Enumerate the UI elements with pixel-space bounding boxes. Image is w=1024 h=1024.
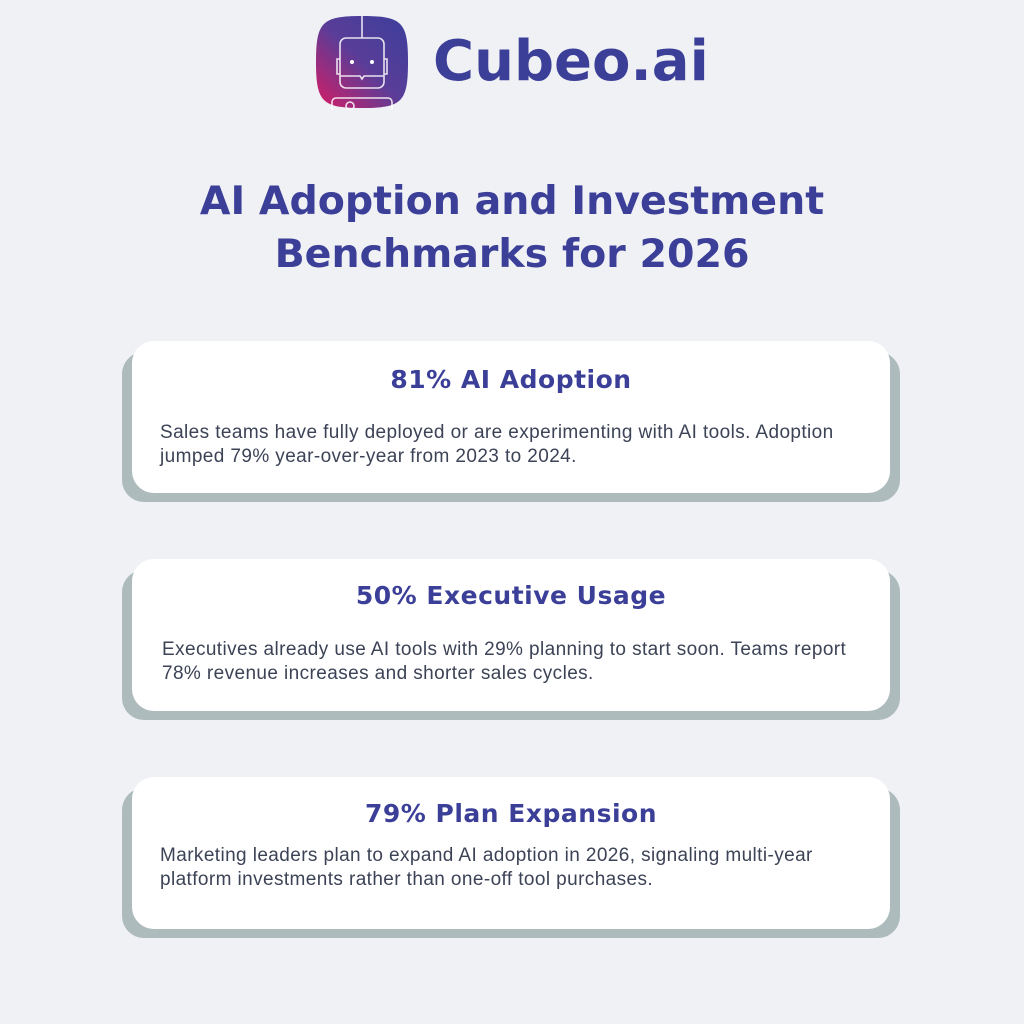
text: Marketing leaders plan to expand AI adoption in 2026, signaling multi-year — [160, 845, 813, 866]
panel: 81% AI Adoption — [132, 341, 890, 493]
title: Benchmarks for 2026 — [275, 231, 749, 277]
panel: 50% Executive Usage — [132, 559, 890, 711]
text — [160, 422, 834, 467]
heading: 50% Executive Usage — [356, 581, 666, 610]
brand name: Cubeo.ai — [433, 29, 709, 94]
text: Executives already use AI tools with 29% planning to start soon. Teams report — [162, 639, 846, 660]
icon: robot — [316, 16, 408, 110]
text — [160, 845, 813, 890]
text — [162, 639, 846, 684]
text: platform investments rather than one-off tool purchases. — [160, 869, 653, 890]
text: 78% revenue increases and shorter sales cycles. — [162, 663, 594, 684]
heading: 81% AI Adoption — [390, 365, 632, 394]
title — [200, 178, 824, 277]
panel: 79% Plan Expansion — [132, 777, 890, 929]
heading: 79% Plan Expansion — [365, 799, 657, 828]
text: jumped 79% year-over-year from 2023 to 2024. — [160, 446, 577, 467]
logo — [316, 16, 709, 110]
title: AI Adoption and Investment — [200, 178, 824, 224]
text: Sales teams have fully deployed or are experimenting with AI tools. Adoption — [160, 422, 834, 443]
